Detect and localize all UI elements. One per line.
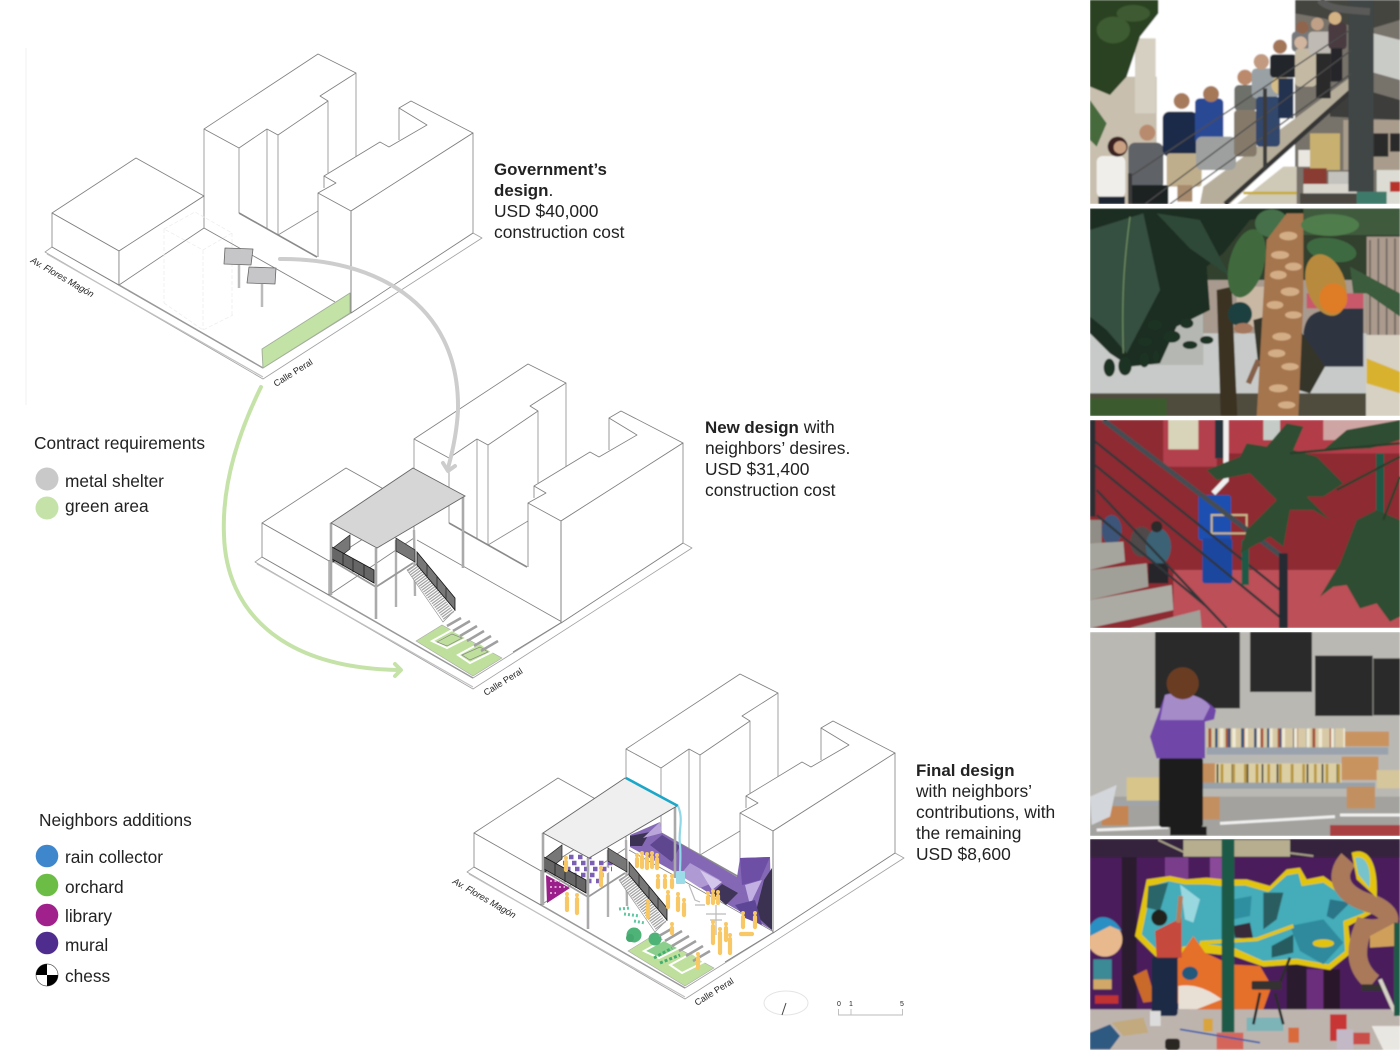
green area with planters [416,625,502,676]
photo: papaya tree [1090,208,1400,416]
book rows [1207,728,1345,749]
green area strip [262,293,350,368]
legend: contract requirements [34,433,205,520]
caption: new design: USD $31,400 [705,459,809,479]
icon: chess [36,964,58,986]
legend: contract requirements: metal shelter [65,471,164,491]
legend: neighbors additions: chess [65,966,111,986]
column and beam [1158,840,1313,856]
rain collector gutter, pipe and tank [626,778,685,884]
legend: neighbors additions: library [65,906,112,926]
rope creature [1341,859,1389,983]
roof [543,778,677,858]
legend: neighbors additions: mural [65,935,108,955]
arrow: metal shelter carried to new design [280,259,458,471]
caption: new design: construction cost [705,480,836,500]
crossing steps [447,618,498,651]
gardener [1253,317,1325,393]
crossing steps [659,928,710,961]
painter [1152,957,1178,1016]
caption: government's design: USD $40,000 [494,201,598,221]
woman [1159,757,1203,827]
photo: red wall with rain barrel [1090,420,1400,628]
orchard garden [619,908,714,986]
mural on back wall [630,822,772,930]
legend: contract requirements: green area [65,496,149,516]
street label: Calle Peral, new design: Calle Peral [482,666,524,698]
scale bar: 1 [849,1001,853,1008]
legend: neighbors additions [36,810,192,986]
metal shelter panels [224,248,276,307]
caption: final design: with neighbors’ [915,781,1032,801]
legend: neighbors additions: rain collector [65,847,163,867]
legend: neighbors additions: Neighbors additions [39,810,192,830]
fox [1177,936,1272,1009]
scale bar: 5 [900,1001,904,1008]
photo: neighbors on the stairs [1090,0,1400,204]
roof: metal shelter [331,468,465,548]
caption: final design: Final design [916,761,1015,780]
scale bar: 0 [837,1001,841,1008]
chair [1253,958,1290,1024]
north compass [764,991,808,1015]
caption: new design: New design with [705,417,835,437]
neighbors silhouettes [566,853,755,968]
caption: government's design: construction cost [494,222,625,242]
furniture sketches [689,885,726,935]
diagram: new design base buildings [255,364,692,689]
arrow: green area carried to new design [224,387,401,676]
leaves [1132,968,1153,1004]
library wall [546,875,570,903]
diagram: government's design [45,54,482,379]
street label: Calle Peral, final design: Calle Peral [693,976,735,1008]
diagram: final design base buildings [467,674,904,999]
existing structure (dashed) [164,212,233,330]
caption: government's design: design. [494,180,553,200]
chess floor [557,851,614,885]
caption: new design: neighbors’ desires. [705,438,850,458]
street label: Av. Flores Magón, final design: Av. Flores Magón [450,876,518,920]
graffiti lettering [1135,868,1373,970]
railings [1130,30,1352,204]
street label: Av. Flores Magón: Av. Flores Magón [28,255,96,299]
people [1097,156,1125,198]
photo: street library [1090,632,1400,836]
photo: graffiti mural [1088,839,1400,1050]
shelter and stairs: final design [543,778,755,986]
legend: neighbors additions: orchard [65,877,124,897]
street label: Calle Peral: Calle Peral [272,357,314,389]
stair flight [619,873,667,932]
caption: final design: USD $8,600 [916,844,1011,864]
scale bar [837,1001,904,1015]
caption: final design: contributions, with [916,802,1055,822]
stair flight [407,563,455,622]
legend: contract requirements: Contract requirements [34,433,205,453]
caption: final design: the remaining [916,823,1021,843]
shelter and stairs: new design [331,468,502,676]
caption: government's design: Government’s [494,160,607,179]
boy character [1088,922,1122,957]
floor and supplies [1090,1009,1400,1050]
